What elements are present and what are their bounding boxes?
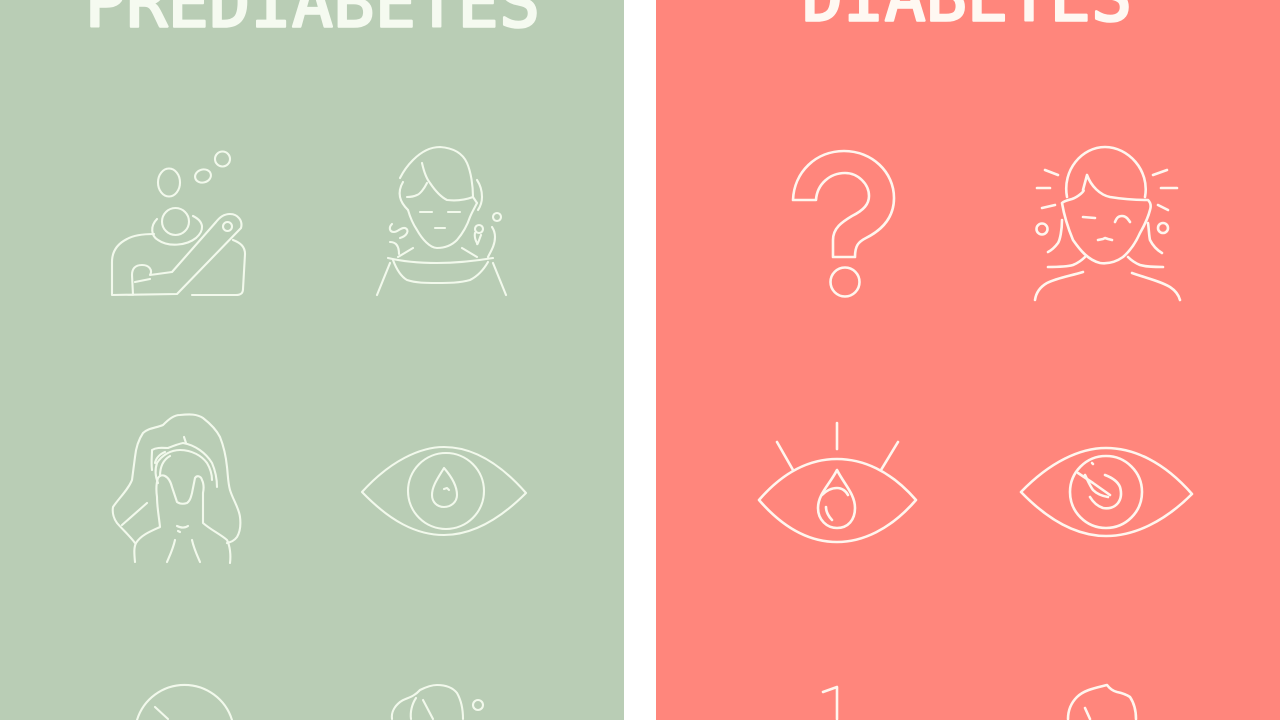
icon: woman with headache rays xyxy=(1035,147,1180,300)
icon: woman holding face xyxy=(113,414,240,563)
icon: cropped circle with slash xyxy=(137,685,232,720)
icon: question mark xyxy=(793,151,894,296)
icon: cropped head xyxy=(1068,685,1136,719)
icon: eye with tear and lashes xyxy=(759,423,916,542)
icon: cropped head with thought bubble xyxy=(392,685,483,719)
panel: diabetes xyxy=(656,0,1280,720)
panel: prediabetes xyxy=(0,0,624,720)
icon: person with thought bubbles xyxy=(112,152,245,295)
icon: eye with crossed swirl xyxy=(1021,448,1192,536)
icon: head with neck and collar xyxy=(377,147,506,295)
icon: eye with droplet xyxy=(362,447,526,535)
icon: cropped number one xyxy=(823,687,837,719)
